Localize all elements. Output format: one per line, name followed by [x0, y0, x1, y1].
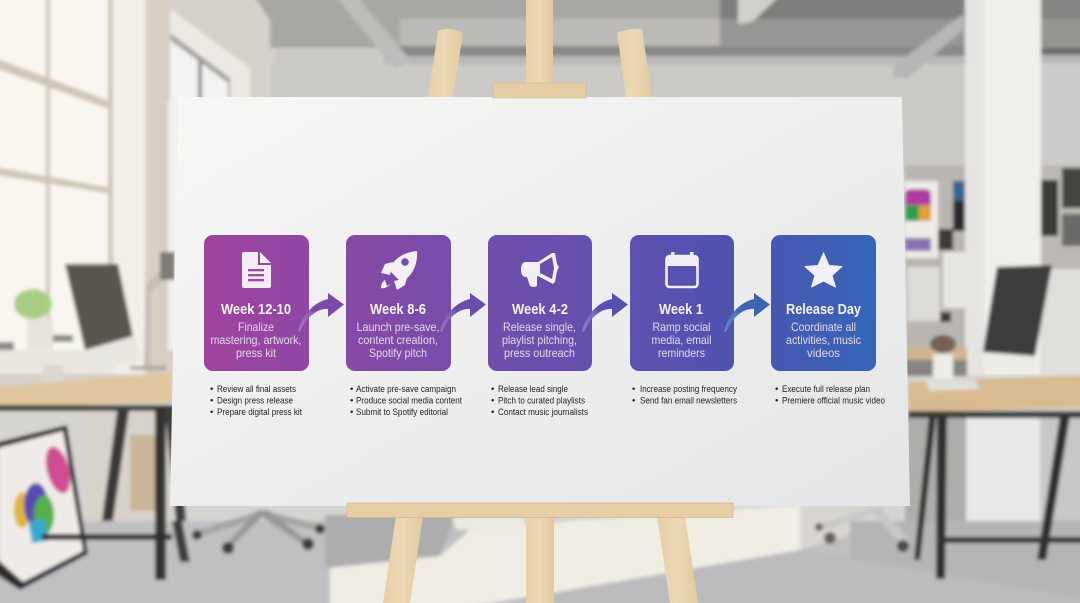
bullets 5: Execute full release plan — [782, 384, 870, 395]
white column — [965, 0, 1041, 375]
icon: rocket — [381, 251, 417, 290]
description: press kit — [236, 346, 277, 360]
card 3: Week 4-2 — [488, 235, 592, 371]
bullets 5: Premiere official music video — [782, 396, 885, 406]
icon: calendar — [666, 252, 698, 287]
right lower leg — [657, 516, 698, 603]
card 2: Week 8-6 — [346, 235, 451, 371]
right desk — [908, 375, 1080, 412]
description: content creation, — [358, 333, 438, 347]
bullets 1: • — [210, 396, 213, 406]
bullets 2: Produce social media content — [356, 396, 462, 406]
description: reminders — [658, 346, 705, 360]
description: Release single, — [503, 320, 576, 334]
description: videos — [807, 346, 840, 360]
bullets 4 — [632, 384, 737, 406]
icon: document — [242, 252, 271, 288]
sunlight on floor — [330, 505, 800, 603]
description — [502, 320, 577, 360]
description — [210, 320, 302, 360]
bullets 3: • — [491, 407, 494, 418]
bullets 5 — [775, 384, 885, 406]
arrow 3 — [582, 293, 628, 332]
bullets 1 — [210, 384, 302, 418]
bullets 1: • — [210, 407, 213, 418]
bullets 3: Release lead single — [498, 384, 568, 395]
description: Finalize — [238, 320, 274, 334]
heading: Week 12-10 — [221, 301, 291, 318]
right wall with posters — [905, 165, 967, 348]
centre mast — [526, 0, 553, 85]
left wall — [0, 0, 275, 400]
bullets 4: Send fan email newsletters — [640, 396, 737, 406]
bullets 3 — [491, 384, 588, 418]
easel bottom ledge — [347, 503, 733, 518]
bullets 5: • — [775, 396, 778, 406]
bullets 4: • — [632, 396, 635, 406]
easel: back posts — [383, 0, 698, 603]
rear wall — [270, 20, 970, 170]
right monitor — [1040, 269, 1080, 375]
description — [786, 320, 861, 360]
white presentation board — [170, 97, 910, 506]
bullets 1: Design press release — [217, 396, 293, 406]
arrow 2 — [440, 293, 486, 332]
lamp — [144, 262, 170, 368]
bullets 4: • — [632, 384, 635, 395]
card 5: Release Day — [771, 235, 876, 371]
desk — [0, 372, 172, 408]
heading: Week 4-2 — [512, 301, 568, 318]
description — [356, 320, 440, 360]
description: Ramp social — [652, 320, 710, 334]
left upper leg — [428, 29, 463, 97]
card 4: Week 1 — [630, 235, 734, 371]
icon: megaphone — [521, 253, 559, 287]
second window — [170, 9, 250, 100]
bullets 3: Pitch to curated playlists — [498, 396, 585, 406]
icon: star — [805, 253, 842, 287]
pillar by window — [113, 0, 146, 374]
left lower leg — [383, 516, 423, 603]
bullets 1: • — [210, 384, 213, 395]
arrow 1 — [298, 293, 344, 332]
bullets 2 — [350, 384, 462, 418]
lower wall + floor — [0, 521, 1080, 603]
description: Coordinate all — [791, 320, 856, 334]
bullets 2: • — [350, 407, 353, 418]
monitor — [88, 334, 142, 372]
plant — [14, 289, 52, 319]
heading: Week 1 — [659, 301, 703, 318]
bullets 2: • — [350, 384, 353, 395]
description: media, email — [652, 333, 712, 347]
right lower wall — [905, 415, 967, 521]
shelf and cup — [905, 348, 967, 360]
heading: Week 8-6 — [370, 301, 426, 318]
bullets 4: Increase posting frequency — [640, 384, 737, 395]
bullets 5: • — [775, 384, 778, 395]
description: activities, music — [786, 333, 861, 347]
easel top clamp — [493, 83, 586, 98]
chair — [199, 510, 325, 536]
right chair — [818, 506, 910, 547]
bullets 3: • — [491, 384, 494, 395]
description — [652, 320, 712, 360]
bullets 3: Contact music journalists — [498, 407, 588, 418]
bullets 3: • — [491, 396, 494, 406]
floor shadow under board — [325, 515, 455, 568]
description: press outreach — [504, 346, 575, 360]
pen cup — [43, 365, 63, 391]
description: playlist pitching, — [502, 333, 577, 347]
framed art — [0, 425, 88, 590]
heading: Release Day — [786, 301, 862, 318]
card 1: Week 12-10 — [204, 235, 309, 371]
description: mastering, artwork, — [210, 333, 302, 347]
bullets 2: • — [350, 396, 353, 406]
bullets 1: Prepare digital press kit — [217, 407, 302, 418]
centre lower leg — [526, 516, 554, 603]
description: Launch pre-save, — [356, 320, 440, 334]
right upper leg — [617, 29, 652, 97]
bullets 2: Submit to Spotify editorial — [356, 407, 448, 418]
description: Spotify pitch — [369, 346, 427, 360]
bullets 2: Activate pre-save campaign — [356, 384, 456, 395]
arrow 4 — [724, 293, 770, 332]
bullets 1: Review all final assets — [217, 384, 296, 395]
ceiling — [250, 0, 1080, 48]
large window — [0, 0, 112, 350]
